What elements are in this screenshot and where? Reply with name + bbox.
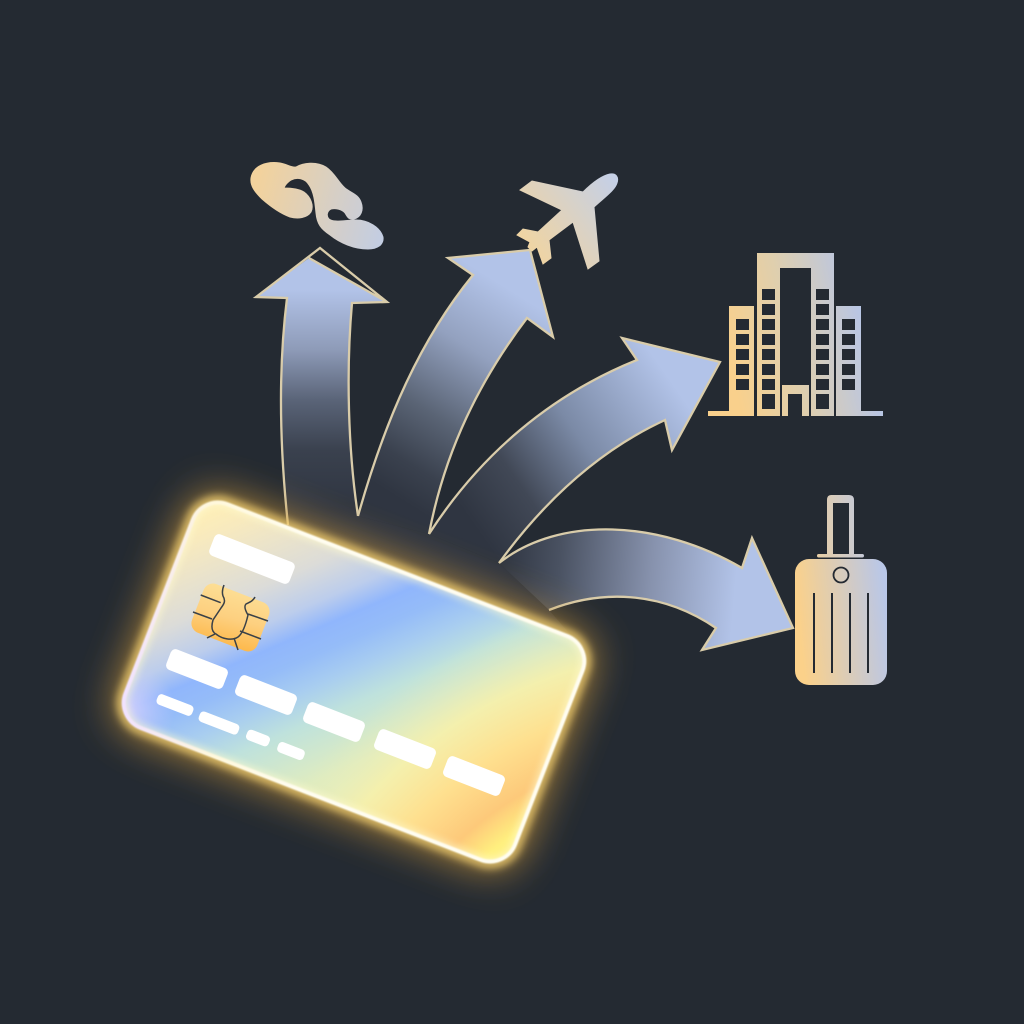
credit card	[104, 483, 604, 881]
icon: luggage	[795, 495, 887, 685]
card body	[114, 493, 594, 871]
arrow: right to hotel	[429, 338, 720, 563]
arrow: up-right to plane	[358, 250, 553, 534]
arrow: right to luggage	[499, 529, 793, 650]
name bar	[208, 533, 296, 585]
infographic: credit card spending flowing to rewards	[88, 162, 887, 897]
icon: cloud	[251, 163, 383, 249]
arrow tails base	[280, 516, 575, 640]
small detail bars	[155, 693, 306, 761]
icon: hotel buildings	[708, 253, 883, 416]
chip	[188, 581, 273, 654]
card number blocks	[165, 648, 506, 797]
arrow: up to cloud	[256, 248, 387, 525]
icon: airplane	[517, 174, 618, 269]
arrows fan	[256, 248, 793, 650]
card bright edge	[116, 495, 592, 869]
card glow	[104, 483, 604, 881]
